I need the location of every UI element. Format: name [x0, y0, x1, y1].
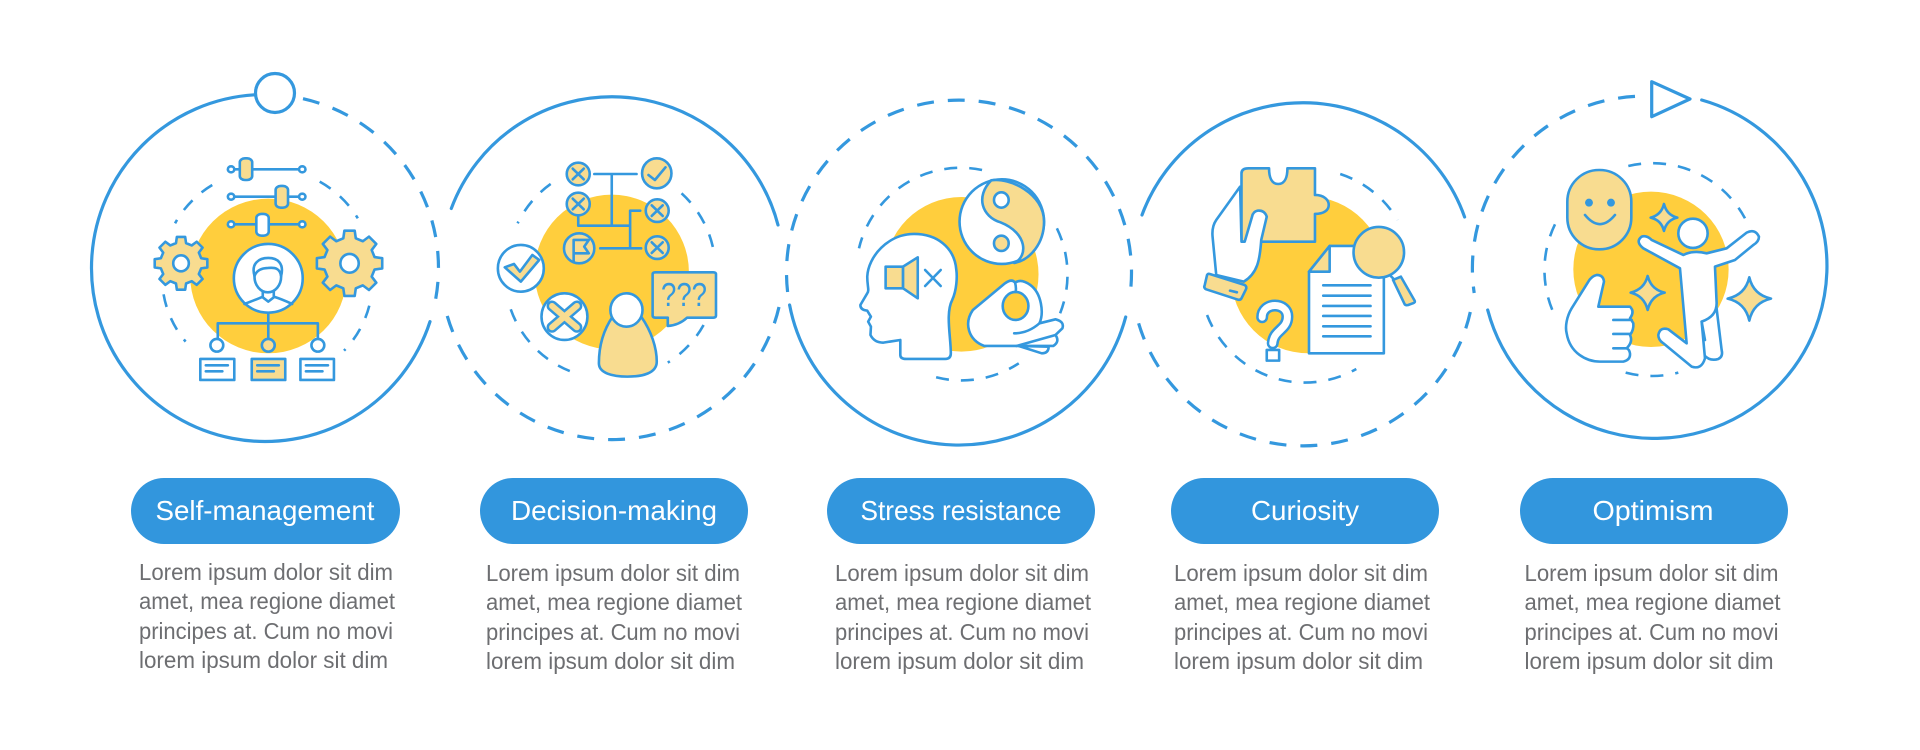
panel: decision-making	[447, 97, 779, 674]
text block: self-management: principes at. Cum no movi	[139, 618, 393, 644]
pill heading: decision-making: Decision-making	[511, 495, 717, 526]
text block: decision-making: lorem ipsum dolor sit dim	[486, 648, 735, 674]
text block: optimism: lorem ipsum dolor sit dim	[1524, 648, 1774, 674]
pill heading: self-management	[131, 478, 400, 544]
text block: curiosity: amet, mea regione diamet	[1174, 589, 1431, 615]
text block: curiosity	[1174, 560, 1431, 674]
text block: decision-making: Lorem ipsum dolor sit dim	[486, 560, 740, 586]
panel: stress resistance	[787, 100, 1132, 674]
icon: optimism	[1544, 163, 1771, 376]
panel: curiosity	[1136, 103, 1470, 674]
text block: decision-making: amet, mea regione diamet	[486, 589, 743, 615]
text block: stress resistance: principes at. Cum no movi	[835, 619, 1089, 645]
text block: curiosity: Lorem ipsum dolor sit dim	[1174, 560, 1428, 586]
pill heading: optimism: Optimism	[1592, 495, 1714, 526]
icon: stress resistance	[859, 168, 1067, 380]
text block: curiosity: principes at. Cum no movi	[1174, 619, 1428, 645]
text block: stress resistance: lorem ipsum dolor sit dim	[835, 648, 1084, 674]
pill heading: self-management: Self-management	[156, 495, 375, 526]
text block: self-management: Lorem ipsum dolor sit dim	[139, 559, 393, 585]
pill heading: optimism	[1520, 478, 1788, 544]
text block: stress resistance: amet, mea regione diamet	[835, 589, 1092, 615]
panel: optimism	[1472, 82, 1827, 674]
text block: decision-making	[486, 560, 743, 674]
text block: self-management: amet, mea regione diamet	[139, 588, 396, 614]
text block: optimism: Lorem ipsum dolor sit dim	[1524, 560, 1778, 586]
text block: optimism: amet, mea regione diamet	[1524, 589, 1781, 615]
circle outline: decision-making	[447, 97, 779, 440]
pill heading: curiosity: Curiosity	[1251, 495, 1359, 526]
circle outline: curiosity	[1136, 103, 1470, 446]
pill heading: stress resistance: Stress resistance	[860, 495, 1062, 526]
circle outline: self-management	[91, 95, 438, 441]
text block: stress resistance: Lorem ipsum dolor sit dim	[835, 560, 1089, 586]
text block: self-management	[139, 559, 396, 673]
pill heading: curiosity	[1171, 478, 1439, 544]
text block: curiosity: lorem ipsum dolor sit dim	[1174, 648, 1423, 674]
panel: self-management	[91, 74, 438, 673]
text block: decision-making: principes at. Cum no movi	[486, 619, 740, 645]
circle outline: optimism	[1472, 96, 1827, 438]
pill heading: decision-making	[480, 478, 748, 544]
icon: self-management	[155, 158, 382, 380]
start marker circle	[256, 74, 294, 112]
text block: optimism: principes at. Cum no movi	[1524, 619, 1778, 645]
icon: decision-making	[498, 158, 716, 377]
end marker triangle	[1652, 82, 1690, 117]
pill heading: stress resistance	[827, 478, 1095, 544]
text block: optimism	[1524, 560, 1781, 674]
text block: self-management: lorem ipsum dolor sit dim	[139, 647, 388, 673]
speech bubble question marks: ???	[661, 276, 707, 313]
icon: curiosity	[1204, 168, 1415, 383]
circle outline: stress resistance	[787, 100, 1132, 445]
text block: stress resistance	[835, 560, 1092, 674]
